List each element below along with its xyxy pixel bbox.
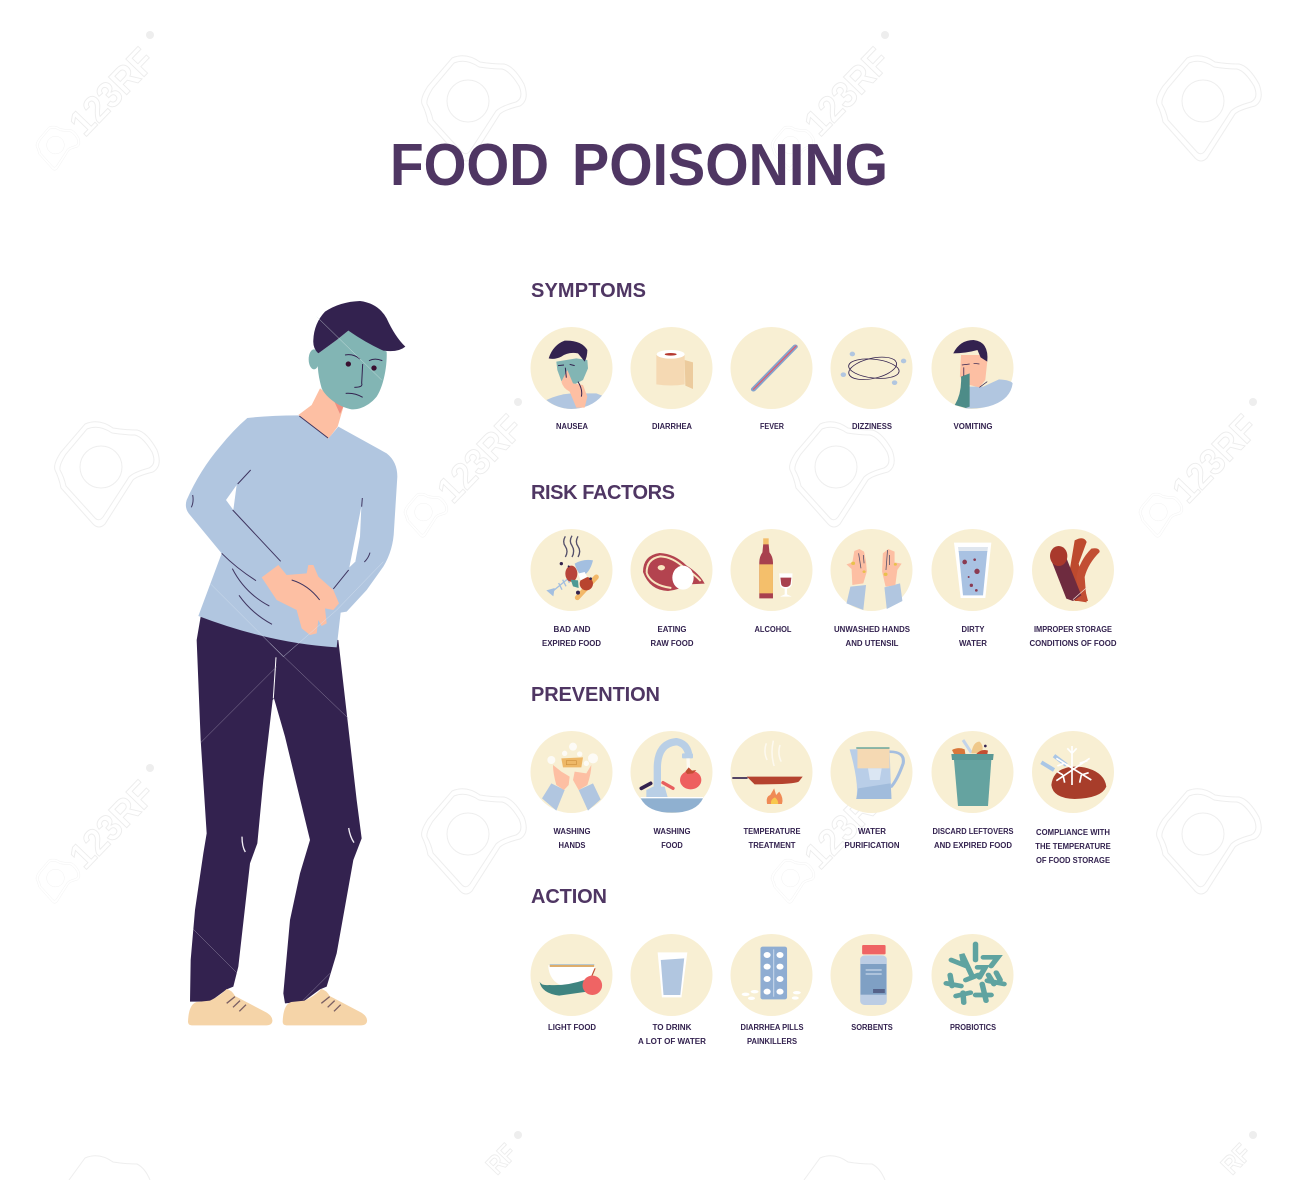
labels: AND EXPIRED FOOD bbox=[934, 840, 1012, 850]
labels: NAUSEA bbox=[556, 421, 588, 431]
labels: THE TEMPERATURE bbox=[1035, 841, 1111, 851]
labels: LIGHT FOOD bbox=[548, 1022, 596, 1032]
labels: PAINKILLERS bbox=[747, 1036, 797, 1046]
icon: pills blister bbox=[742, 947, 801, 1000]
labels: COMPLIANCE WITH bbox=[1036, 827, 1110, 837]
icon: washing hands bbox=[542, 743, 601, 811]
icon: temperature treatment bbox=[732, 741, 803, 804]
icon: vomiting bbox=[953, 340, 1013, 409]
labels: FEVER bbox=[760, 421, 785, 431]
action row bbox=[530, 934, 1014, 1046]
labels: ALCOHOL bbox=[754, 624, 792, 634]
labels: DIARRHEA PILLS bbox=[740, 1022, 804, 1032]
icon: light food bbox=[540, 964, 602, 996]
labels: FOOD bbox=[661, 840, 683, 850]
trousers and shoes bbox=[188, 617, 367, 1025]
title: POISONING bbox=[572, 132, 888, 198]
icon: diarrhea toilet roll bbox=[656, 350, 693, 389]
labels: AND UTENSIL bbox=[846, 638, 898, 648]
labels: WATER bbox=[858, 826, 887, 836]
heading: prevention: PREVENTION bbox=[531, 684, 660, 706]
icon: discard leftovers bbox=[951, 740, 994, 806]
icon: fever thermometer bbox=[753, 346, 796, 389]
labels: PURIFICATION bbox=[844, 840, 900, 850]
labels: TREATMENT bbox=[748, 840, 796, 850]
icon: washing food bbox=[641, 742, 703, 813]
prevention row bbox=[530, 731, 1114, 865]
labels: DIARRHEA bbox=[652, 421, 692, 431]
icon: nausea bbox=[546, 341, 602, 409]
neck, sweater, head and hands bbox=[186, 301, 405, 657]
labels: WASHING bbox=[654, 826, 691, 836]
icon: dirty water bbox=[954, 543, 991, 598]
icon: sausage bbox=[1050, 538, 1100, 602]
icon: dizziness bbox=[841, 352, 906, 385]
icon: probiotics bbox=[946, 944, 1004, 1003]
watermark pattern: RF bbox=[1215, 1138, 1257, 1180]
icon: compliance with storage temperature bbox=[1041, 746, 1106, 799]
heading: risk factors: RISK FACTORS bbox=[531, 482, 675, 504]
labels: PROBIOTICS bbox=[950, 1022, 996, 1032]
icon: sorbents bottle bbox=[860, 945, 887, 1005]
labels: RAW FOOD bbox=[650, 638, 694, 648]
icon: raw meat and egg bbox=[643, 553, 705, 591]
illustration: sick man holding stomach bbox=[186, 301, 405, 1025]
heading: symptoms: SYMPTOMS bbox=[531, 280, 646, 302]
labels: TEMPERATURE bbox=[744, 826, 801, 836]
labels: VOMITING bbox=[954, 421, 993, 431]
labels: EXPIRED FOOD bbox=[542, 638, 601, 648]
labels: UNWASHED HANDS bbox=[834, 624, 910, 634]
labels bbox=[542, 624, 1116, 648]
labels: A LOT OF WATER bbox=[638, 1036, 707, 1046]
labels: WATER bbox=[959, 638, 988, 648]
labels: DIZZINESS bbox=[852, 421, 892, 431]
labels: SORBENTS bbox=[851, 1022, 893, 1032]
heading: action: ACTION bbox=[531, 886, 607, 908]
labels bbox=[554, 826, 1111, 865]
risk factors row bbox=[530, 529, 1116, 648]
labels: DIRTY bbox=[962, 624, 985, 634]
labels: OF FOOD STORAGE bbox=[1036, 855, 1110, 865]
labels: HANDS bbox=[558, 840, 586, 850]
title: FOOD bbox=[390, 132, 549, 198]
labels: IMPROPER STORAGE bbox=[1034, 624, 1112, 634]
labels: BAD AND bbox=[554, 624, 590, 634]
symptoms row bbox=[530, 327, 1014, 431]
title bbox=[390, 132, 888, 198]
labels: TO DRINK bbox=[652, 1022, 692, 1032]
labels bbox=[556, 421, 993, 431]
icon: unwashed hands bbox=[846, 549, 902, 610]
icon: water purification jug bbox=[850, 748, 903, 799]
icon: glass of water bbox=[658, 952, 687, 997]
icon: bad and expired food bbox=[546, 536, 596, 598]
watermark pattern: RF bbox=[480, 1138, 522, 1180]
labels: DISCARD LEFTOVERS bbox=[932, 826, 1014, 836]
icon: alcohol bbox=[759, 538, 793, 598]
labels bbox=[548, 1022, 996, 1046]
labels: CONDITIONS OF FOOD bbox=[1030, 638, 1116, 648]
labels: WASHING bbox=[554, 826, 591, 836]
labels: EATING bbox=[658, 624, 687, 634]
